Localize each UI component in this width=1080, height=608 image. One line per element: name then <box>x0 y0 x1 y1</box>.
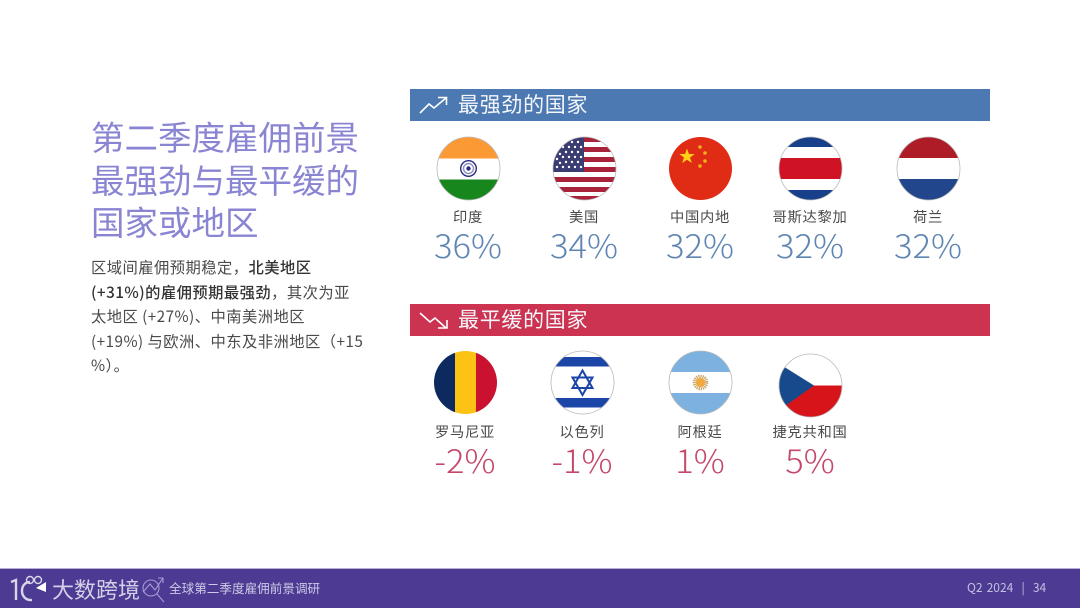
label: Romania: 罗马尼亚 <box>435 421 495 442</box>
body text: (+31%)的雇佣预期最强劲，其次为亚 <box>91 281 350 303</box>
body text <box>91 256 363 376</box>
title: 第二季度雇佣前景 <box>91 111 359 160</box>
value: Czech Republic: 5% <box>785 437 835 483</box>
icon: magnifier chart <box>142 578 164 602</box>
panel: strongest header <box>410 89 990 121</box>
panel: weakest header: 最平缓的国家 <box>458 304 588 334</box>
flag: India <box>436 136 500 200</box>
icon: falling arrow <box>420 312 448 329</box>
flag: USA <box>552 136 616 200</box>
flag: Argentina <box>668 350 732 414</box>
value: India: 36% <box>434 222 502 268</box>
flag: Israel <box>550 350 614 414</box>
value: Netherlands: 32% <box>894 222 962 268</box>
value: Argentina: 1% <box>675 437 725 483</box>
footer bar <box>0 568 1080 608</box>
label: Israel: 以色列 <box>560 421 604 442</box>
flag: Costa Rica <box>778 136 842 200</box>
flag: China <box>669 137 732 200</box>
page number: Q2 2024 | 34 <box>967 579 1046 596</box>
value: Costa Rica: 32% <box>776 222 844 268</box>
watermark text: 大数跨境 <box>52 573 140 605</box>
body text: 太地区 (+27%)、中南美洲地区 <box>91 305 305 327</box>
body text: %）。 <box>91 354 129 376</box>
title <box>91 111 359 245</box>
label: USA: 美国 <box>569 206 599 227</box>
value: Israel: -1% <box>551 437 612 483</box>
panel: strongest header: 最强劲的国家 <box>458 89 588 119</box>
panel: weakest header <box>410 304 990 336</box>
body text: (+19%) 与欧洲、中东及非洲地区（+15 <box>91 330 363 352</box>
icon: rising arrow <box>420 96 448 114</box>
flag: Czech Republic <box>778 354 842 418</box>
label: Costa Rica: 哥斯达黎加 <box>772 206 847 227</box>
flag: Romania <box>434 351 497 414</box>
footer title: 全球第二季度雇佣前景调研 <box>169 578 320 597</box>
value: Chinese mainland: 32% <box>666 222 734 268</box>
value: USA: 34% <box>550 222 618 268</box>
body text: 区域间雇佣预期稳定，北美地区 <box>91 256 311 278</box>
icon: watermark logo <box>10 576 46 602</box>
label: Argentina: 阿根廷 <box>678 421 722 442</box>
value: Romania: -2% <box>434 437 495 483</box>
title: 最强劲与最平缓的 <box>91 154 359 202</box>
flag: Netherlands <box>896 136 960 200</box>
title: 国家或地区 <box>91 196 258 245</box>
label: India: 印度 <box>453 206 483 227</box>
label: Chinese mainland: 中国内地 <box>670 206 730 227</box>
label: Netherlands: 荷兰 <box>913 206 943 227</box>
label: Czech Republic: 捷克共和国 <box>772 421 847 442</box>
